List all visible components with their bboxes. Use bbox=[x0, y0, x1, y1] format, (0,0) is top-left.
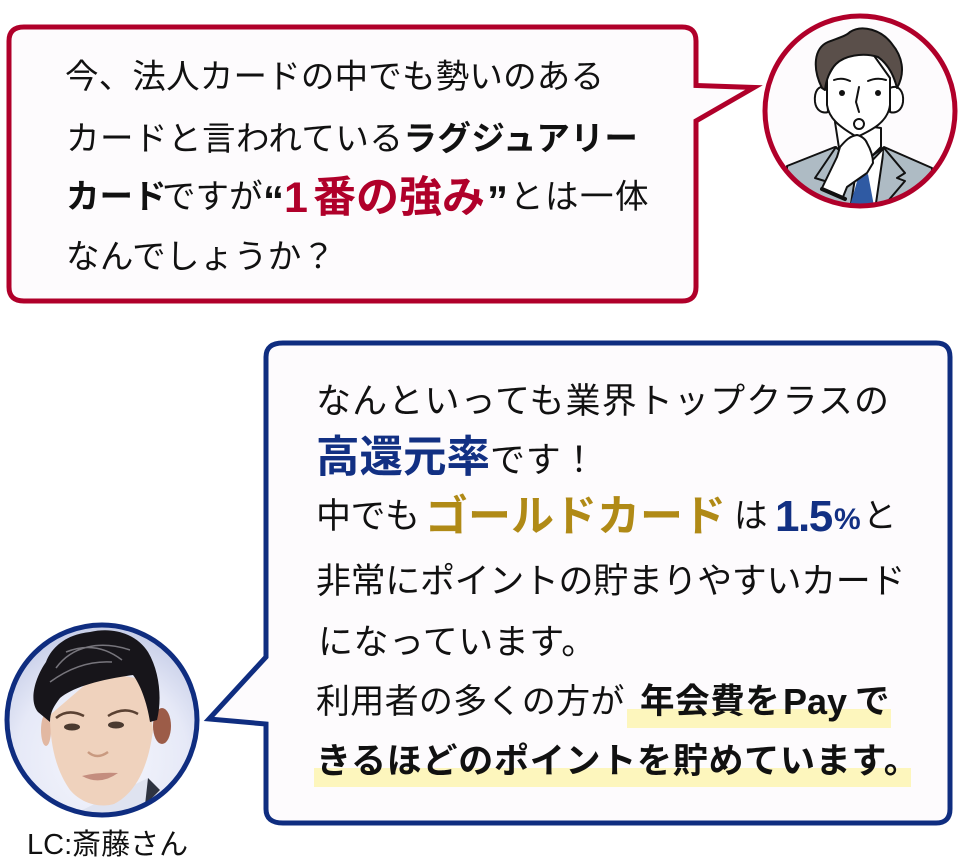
text block: question bbox=[65, 59, 650, 276]
text: なんでしょうか？ bbox=[66, 239, 336, 276]
icon: illustrated businessman avatar bbox=[765, 16, 955, 215]
caption: LC name: LC:斎藤さん bbox=[27, 829, 188, 861]
text: と bbox=[863, 498, 896, 535]
text: 今、法人カードの中でも勢いのある bbox=[65, 59, 604, 96]
text: 1 bbox=[284, 174, 308, 222]
text: Pay bbox=[783, 681, 847, 722]
text: ですが bbox=[162, 179, 262, 216]
text: 年会費を bbox=[640, 683, 780, 721]
text: で bbox=[855, 683, 890, 721]
text: カードと言われているラグジュアリー bbox=[66, 121, 638, 158]
text: ゴールドカード bbox=[425, 493, 726, 541]
text: カード bbox=[66, 179, 166, 216]
text: なんといっても業界トップクラスの bbox=[316, 382, 890, 421]
text: は bbox=[734, 498, 768, 535]
text: 番の強み bbox=[313, 174, 485, 222]
icon: LC Saito portrait bbox=[7, 625, 197, 830]
text block: answer bbox=[316, 382, 920, 781]
text: とは一体 bbox=[510, 179, 650, 216]
text: 高還元率です！ bbox=[316, 434, 597, 482]
text: “ bbox=[263, 177, 284, 224]
text: 中でも bbox=[316, 497, 420, 536]
panel: question bubble bbox=[9, 27, 754, 301]
highlight marker bbox=[314, 709, 911, 787]
text: 利用者の多くの方が bbox=[316, 683, 625, 721]
text: になっています。 bbox=[318, 623, 597, 662]
panel: answer bubble bbox=[209, 343, 950, 823]
text: % bbox=[834, 503, 860, 536]
text: ” bbox=[487, 177, 508, 224]
text: きるほどのポイントを貯めています。 bbox=[316, 742, 920, 781]
text: 非常にポイントの貯まりやすいカード bbox=[316, 562, 905, 601]
text: 1.5 bbox=[775, 492, 832, 541]
